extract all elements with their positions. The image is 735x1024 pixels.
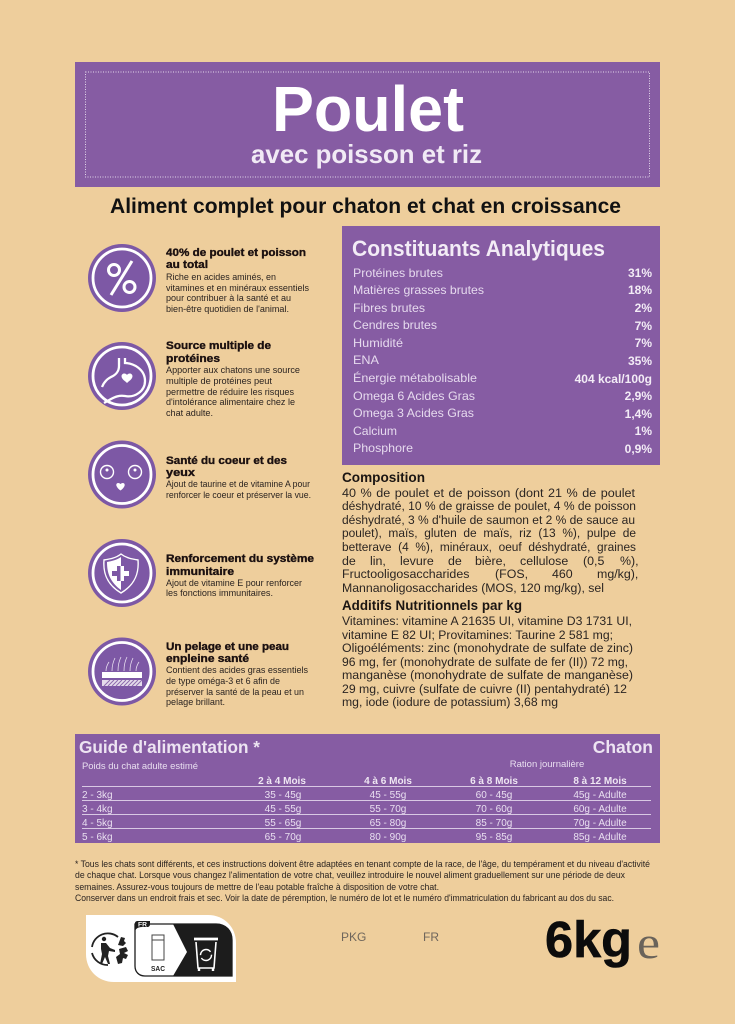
text block: Apporter aux chatons une source bbox=[166, 365, 300, 376]
text block: Un pelage et une peau bbox=[166, 641, 289, 653]
table rows: 85 - 70g bbox=[476, 818, 512, 829]
table column headers: 6 à 8 Mois bbox=[470, 776, 518, 787]
analytical rows: Cendres brutes bbox=[353, 318, 437, 332]
table column headers: 2 à 4 Mois bbox=[258, 776, 306, 787]
text block: multiple de protéines peut bbox=[166, 376, 272, 387]
table heading: Guide d'alimentation * bbox=[79, 737, 260, 757]
benefit: source multiple de protéines bbox=[88, 340, 300, 419]
additifs body: vitamine E 82 UI; Provitamines: Taurine 2 581 mg; bbox=[342, 628, 613, 642]
analytical rows: 7% bbox=[635, 319, 652, 333]
table rows: 65 - 80g bbox=[370, 818, 406, 829]
axis label: weight: Poids du chat adulte estimé bbox=[82, 761, 198, 772]
table rows: 80 - 90g bbox=[370, 832, 406, 843]
table column headers: 8 à 12 Mois bbox=[573, 776, 627, 787]
icon: recycling bin bbox=[194, 939, 218, 971]
text block: pelage brillant. bbox=[166, 697, 225, 708]
panel: feeding guide table bbox=[75, 734, 660, 843]
analytical rows: Phosphore bbox=[353, 441, 413, 455]
table grid bbox=[82, 786, 651, 828]
composition body: déshydraté, 10 % de graisse de poulet, 4 % de poisson bbox=[342, 499, 636, 513]
text block: yeux bbox=[166, 467, 196, 479]
text block: chat adulte. bbox=[166, 408, 213, 419]
text block: les fonctions immunitaires. bbox=[166, 588, 273, 599]
analytical rows: Fibres brutes bbox=[353, 301, 425, 315]
composition body: 40 % de poulet et de poisson (dont 21 % de poulet bbox=[342, 486, 636, 500]
label: SAC: SAC bbox=[151, 966, 165, 973]
analytical rows: Humidité bbox=[353, 336, 403, 350]
text block: Source multiple de bbox=[166, 340, 271, 352]
table column headers bbox=[258, 776, 627, 787]
text block: renforcer le coeur et préserver la vue. bbox=[166, 490, 311, 501]
analytical rows: 35% bbox=[628, 354, 652, 368]
text block: bien-être quotidien de l'animal. bbox=[166, 304, 289, 315]
text block: d'intolérance alimentaire chez le bbox=[166, 397, 295, 408]
composition body: Fructooligosaccharides bbox=[342, 567, 469, 581]
text block: additifs nutritionnels bbox=[342, 597, 633, 709]
analytical rows: 0,9% bbox=[625, 442, 652, 456]
additifs body: Oligoéléments: zinc (monohydrate de sulfate de zinc) bbox=[342, 641, 633, 655]
analytical rows: 31% bbox=[628, 266, 652, 280]
analytical rows: 404 kcal/100g bbox=[575, 372, 652, 386]
composition body: bière, bbox=[475, 554, 506, 568]
text block bbox=[166, 553, 314, 599]
icon: shield with cross bbox=[88, 539, 156, 607]
text block: 40% de poulet et poisson bbox=[166, 247, 306, 259]
footnote: de chaque chat. Lorsque vous changez l'alimentation de votre chat, veuillez introduire le nouvel aliment graduellement sur une période de deux bbox=[75, 870, 625, 881]
analytical rows bbox=[353, 266, 652, 456]
text block bbox=[166, 641, 308, 708]
composition body bbox=[342, 486, 639, 595]
text block: au total bbox=[166, 259, 208, 271]
footnote: * Tous les chats sont différents, et ces instructions doivent être adaptées en tenant compte de la race, de l'âge, du tempérament et du niveau d'activité bbox=[75, 859, 650, 870]
icon: stomach with heart bbox=[88, 342, 156, 410]
icon: percent bbox=[88, 244, 156, 312]
composition body: lin, bbox=[370, 554, 386, 568]
table rows: 3 - 4kg bbox=[82, 804, 113, 815]
additifs body: manganèse (monohydrate de sulfate de manganèse) bbox=[342, 668, 633, 682]
text block: Ajout de taurine et de vitamine A pour bbox=[166, 479, 310, 490]
table rows: 35 - 45g bbox=[265, 790, 301, 801]
table rows: 70 - 60g bbox=[476, 804, 512, 815]
text block: de type oméga-3 et 6 afin de bbox=[166, 676, 280, 687]
table rows: 55 - 70g bbox=[370, 804, 406, 815]
analytical rows: Matières grasses brutes bbox=[353, 283, 484, 297]
axis label: daily ration: Ration journalière bbox=[510, 759, 584, 770]
composition body: (0,5 bbox=[583, 554, 604, 568]
composition body: déshydraté, 3 % d'huile de saumon et 2 % de sauce au bbox=[342, 513, 635, 527]
additifs heading: Additifs Nutritionnels par kg bbox=[342, 597, 522, 613]
icon: skin and fur bbox=[88, 638, 156, 706]
label: FR: FR bbox=[423, 930, 439, 944]
analytical rows: Protéines brutes bbox=[353, 266, 443, 280]
table rows: 60g - Adulte bbox=[573, 804, 627, 815]
text block: Renforcement du système bbox=[166, 553, 314, 565]
composition body: levure bbox=[400, 554, 434, 568]
text block: Contient des acides gras essentiels bbox=[166, 665, 308, 676]
table rows: 4 - 5kg bbox=[82, 818, 113, 829]
footnote bbox=[75, 859, 650, 904]
table column headers: 4 à 6 Mois bbox=[364, 776, 412, 787]
table rows: 85g - Adulte bbox=[573, 832, 627, 843]
composition body: 460 bbox=[552, 567, 573, 581]
analytical rows: Énergie métabolisable bbox=[353, 370, 477, 385]
panel heading: Constituants Analytiques bbox=[352, 236, 605, 261]
analytical rows: 2% bbox=[635, 301, 652, 315]
text block: Riche en acides aminés, en bbox=[166, 272, 276, 283]
additifs body: mg, iode (iodure de potassium) 3,68 mg bbox=[342, 695, 558, 709]
text block: composition bbox=[342, 469, 639, 595]
composition body: de bbox=[448, 554, 462, 568]
analytical rows: ENA bbox=[353, 353, 379, 367]
table rows: 65 - 70g bbox=[265, 832, 301, 843]
text block bbox=[166, 455, 311, 501]
recycling logo: Triman and Info-tri bbox=[86, 915, 236, 982]
composition body: %), bbox=[620, 554, 639, 568]
text block: préserver la santé de la peau et un bbox=[166, 687, 304, 698]
analytical rows: 2,9% bbox=[625, 389, 652, 403]
benefit: renforcement du système immunitaire bbox=[88, 539, 314, 607]
text block: enpleine santé bbox=[166, 653, 249, 665]
estimated sign: e bbox=[637, 917, 660, 968]
additifs body: 96 mg, fer (monohydrate de sulfate de fer (II)) 72 mg, bbox=[342, 655, 628, 669]
icon: info-tri frame bbox=[135, 921, 232, 976]
analytical rows: Omega 3 Acides Gras bbox=[353, 406, 474, 420]
additifs body bbox=[342, 614, 633, 709]
composition body: (FOS, bbox=[495, 567, 528, 581]
net weight: 6kg bbox=[545, 911, 632, 968]
benefit: 40% poulet et poisson bbox=[88, 244, 309, 315]
composition body: betterave (4 %), minéraux, oeuf déshydraté, graines bbox=[342, 540, 636, 554]
composition body: poulet), maïs, gluten de maïs, riz (13 %), pulpe de bbox=[342, 526, 636, 540]
text block bbox=[166, 247, 309, 315]
analytical rows: 18% bbox=[628, 283, 652, 297]
footnote: Conserver dans un endroit frais et sec. Voir la date de péremption, le numéro de lot et le numéro d'immatriculation du fabricant au dos du sac. bbox=[75, 893, 614, 904]
text block: Ajout de vitamine E pour renforcer bbox=[166, 578, 302, 589]
text block: protéines bbox=[166, 353, 220, 365]
analytical rows: 1% bbox=[635, 424, 652, 438]
footnote: semaines. Assurez-vous toujours de mettre de l'eau potable fraîche à disposition de votre chat. bbox=[75, 882, 439, 893]
benefit: pelage et peau bbox=[88, 638, 308, 708]
additifs body: Vitamines: vitamine A 21635 UI, vitamine D3 1731 UI, bbox=[342, 614, 632, 628]
benefit: santé du coeur et des yeux bbox=[88, 440, 311, 508]
text block: vitamines et en minéraux essentiels bbox=[166, 283, 309, 294]
title: Poulet: Poulet bbox=[272, 73, 464, 145]
heading: product description: Aliment complet pour chaton et chat en croissance bbox=[110, 194, 621, 218]
text block: Santé du coeur et des bbox=[166, 455, 287, 467]
table rows: 70g - Adulte bbox=[573, 818, 627, 829]
analytical rows: 7% bbox=[635, 336, 652, 350]
table rows: 5 - 6kg bbox=[82, 832, 113, 843]
analytical rows: Omega 6 Acides Gras bbox=[353, 389, 475, 403]
subtitle: avec poisson et riz bbox=[251, 139, 482, 169]
text block bbox=[166, 340, 300, 419]
additifs body: 29 mg, cuivre (sulfate de cuivre (II) pentahydraté) 12 bbox=[342, 682, 627, 696]
table rows: 55 - 65g bbox=[265, 818, 301, 829]
table rows bbox=[82, 790, 627, 843]
text block: immunitaire bbox=[166, 566, 234, 578]
analytical rows: Calcium bbox=[353, 424, 397, 438]
panel: constituants analytiques bbox=[342, 226, 660, 465]
text block: pour contribuer à la santé et au bbox=[166, 293, 291, 304]
panel: header banner bbox=[75, 62, 660, 187]
table rows: 2 - 3kg bbox=[82, 790, 113, 801]
table category: Chaton bbox=[593, 737, 653, 757]
table rows: 45 - 55g bbox=[265, 804, 301, 815]
label: PKG: PKG bbox=[341, 930, 366, 944]
icon: triman figure bbox=[92, 933, 128, 965]
table rows: 45 - 55g bbox=[370, 790, 406, 801]
table rows: 60 - 45g bbox=[476, 790, 512, 801]
composition body: mg/kg), bbox=[597, 567, 638, 581]
composition body: de bbox=[342, 554, 356, 568]
text block: permettre de réduire les risques bbox=[166, 387, 294, 398]
table rows: 45g - Adulte bbox=[573, 790, 627, 801]
analytical rows: 1,4% bbox=[625, 407, 652, 421]
icon: bag bbox=[152, 935, 164, 960]
composition body: cellulose bbox=[520, 554, 568, 568]
table rows: 95 - 85g bbox=[476, 832, 512, 843]
composition body: Mannanoligosaccharides (MOS, 120 mg/kg), sel bbox=[342, 581, 604, 595]
composition heading: Composition bbox=[342, 469, 425, 485]
label: FR: FR bbox=[138, 922, 147, 928]
icon: cat eyes and heart bbox=[88, 440, 156, 508]
